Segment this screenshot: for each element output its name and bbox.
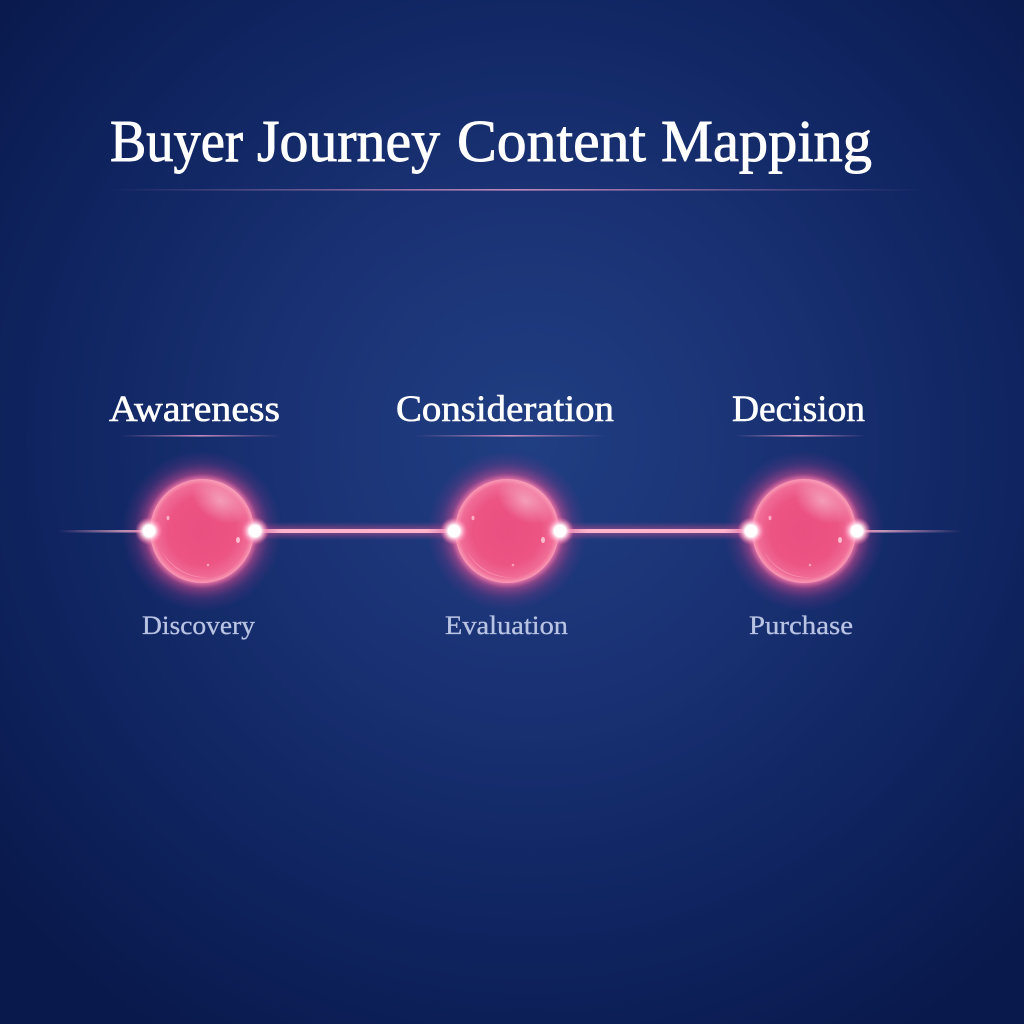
stage heading: Awareness: Awareness	[109, 389, 280, 430]
title	[110, 108, 872, 174]
sphere: Decision	[724, 451, 884, 611]
journey connector line	[58, 522, 962, 540]
label: Discovery: Discovery	[142, 611, 255, 640]
stage heading: Decision: Decision	[732, 389, 865, 430]
sphere: Consideration	[427, 451, 587, 611]
title: Mapping	[661, 108, 872, 174]
title: Buyer	[110, 108, 243, 174]
title: Content	[457, 108, 647, 174]
title underline	[105, 189, 925, 191]
title: Journey	[257, 108, 440, 174]
sphere: Awareness	[122, 451, 282, 611]
stage heading: Consideration: Consideration	[396, 389, 614, 430]
label: Evaluation: Evaluation	[445, 611, 568, 640]
label: Purchase: Purchase	[749, 611, 853, 640]
